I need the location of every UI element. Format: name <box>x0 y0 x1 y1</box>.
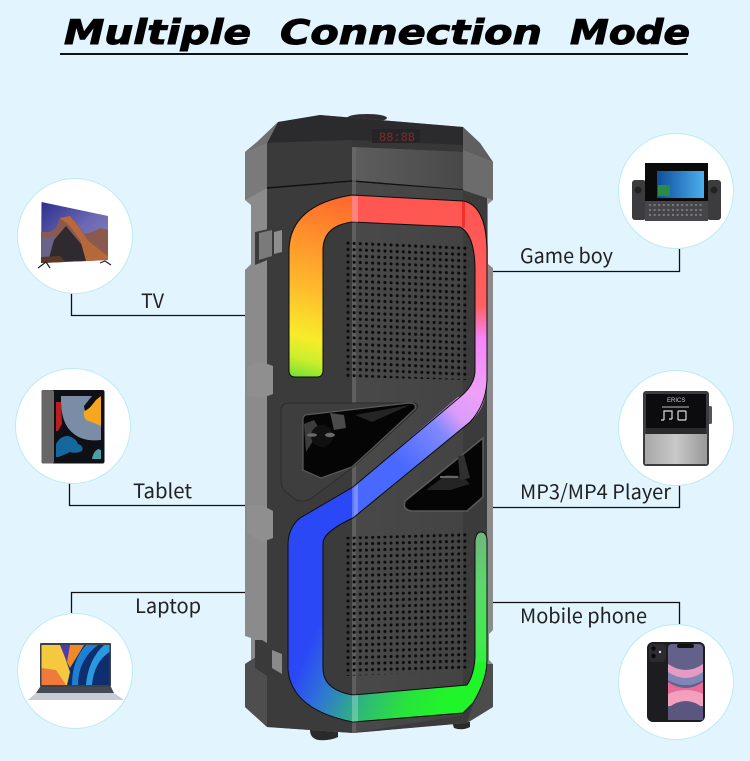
connector: Game boy <box>492 249 680 272</box>
RGB band: blue green section <box>288 487 487 722</box>
RGB band outline <box>288 195 487 722</box>
upper front facet <box>352 147 463 190</box>
title <box>60 13 690 55</box>
title: Multiple <box>64 13 251 53</box>
vent panel: upper <box>281 403 418 501</box>
label: TV: TV <box>141 285 164 314</box>
left side clip top <box>255 226 282 265</box>
left side clip bottom <box>255 640 282 678</box>
connector: Mobile phone <box>492 602 680 624</box>
band highlight <box>352 196 358 722</box>
label: Laptop: Laptop <box>135 590 201 619</box>
device: MP3/MP4 Player <box>618 370 734 486</box>
device: Mobile phone <box>618 624 734 740</box>
title: Connection <box>280 13 542 53</box>
speaker top deck <box>267 115 463 152</box>
left side bump upper <box>247 362 273 398</box>
center ridge <box>352 147 356 733</box>
speaker silhouette <box>245 115 493 733</box>
speaker grille upper <box>345 239 469 380</box>
RGB band: right green bar <box>475 532 487 662</box>
vent window: lower fan <box>404 438 483 511</box>
label: MP3/MP4 Player: MP3/MP4 Player <box>520 476 671 505</box>
device: Game boy <box>618 134 734 248</box>
speaker left lower corner <box>245 650 267 727</box>
seam <box>267 181 463 190</box>
RGB band: red pink section <box>352 195 487 398</box>
label: Game boy: Game boy <box>520 240 614 269</box>
center front panel <box>352 182 463 733</box>
speaker right lower corner <box>467 664 493 723</box>
RGB band: orange yellow section <box>289 195 352 377</box>
upper left panel <box>267 140 352 188</box>
left side bump lower <box>247 505 273 542</box>
connector: Tablet <box>70 483 246 506</box>
speaker knob <box>347 114 387 122</box>
band red overlay <box>462 202 465 228</box>
speaker grille lower <box>345 533 469 676</box>
title: Mode <box>570 13 690 53</box>
right shoulder facet <box>463 127 493 162</box>
left shoulder facet <box>245 143 267 200</box>
device: Tablet <box>16 368 130 484</box>
display: 88:88 <box>379 130 415 145</box>
RGB band: pink blue diagonal section <box>353 391 486 518</box>
device: TV <box>18 178 132 294</box>
connector: Laptop <box>72 592 246 613</box>
connector: TV <box>72 293 246 316</box>
label: Mobile phone: Mobile phone <box>520 600 647 629</box>
speaker feet <box>310 722 470 740</box>
connector: MP3/MP4 Player <box>492 485 680 508</box>
vent window: upper fan <box>303 403 415 478</box>
top deck lower strip <box>267 140 463 152</box>
speaker body <box>267 182 487 733</box>
device: Laptop <box>18 614 132 728</box>
speaker <box>245 114 493 740</box>
device: MP3/MP4 Player: ERICS <box>667 398 685 404</box>
label: Tablet: Tablet <box>133 475 192 504</box>
